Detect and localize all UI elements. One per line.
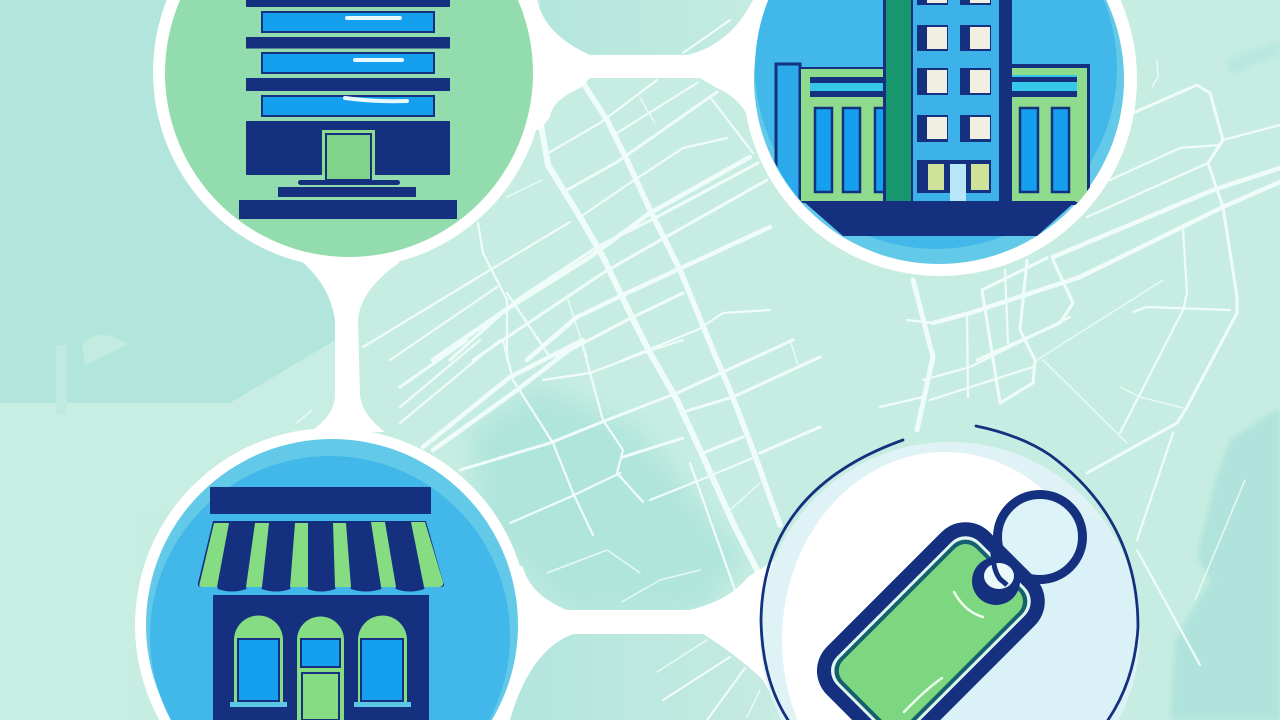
icon: tag bbox=[803, 494, 1082, 720]
white connector: vertical link bbox=[300, 260, 400, 432]
icon: tower building bbox=[776, 0, 1090, 236]
white connector: top band bbox=[520, 0, 775, 130]
white connector: bottom band bbox=[480, 555, 795, 720]
circle: tower building on blue bbox=[743, 0, 1137, 276]
icon: office building bbox=[239, 0, 457, 219]
circle: office building on green bbox=[153, 0, 545, 268]
ring outline bbox=[761, 426, 1138, 720]
icon: storefront bbox=[198, 487, 444, 720]
circle: price tag bbox=[760, 426, 1145, 720]
street network bbox=[297, 20, 1280, 720]
circle: storefront on blue bbox=[135, 426, 1145, 720]
